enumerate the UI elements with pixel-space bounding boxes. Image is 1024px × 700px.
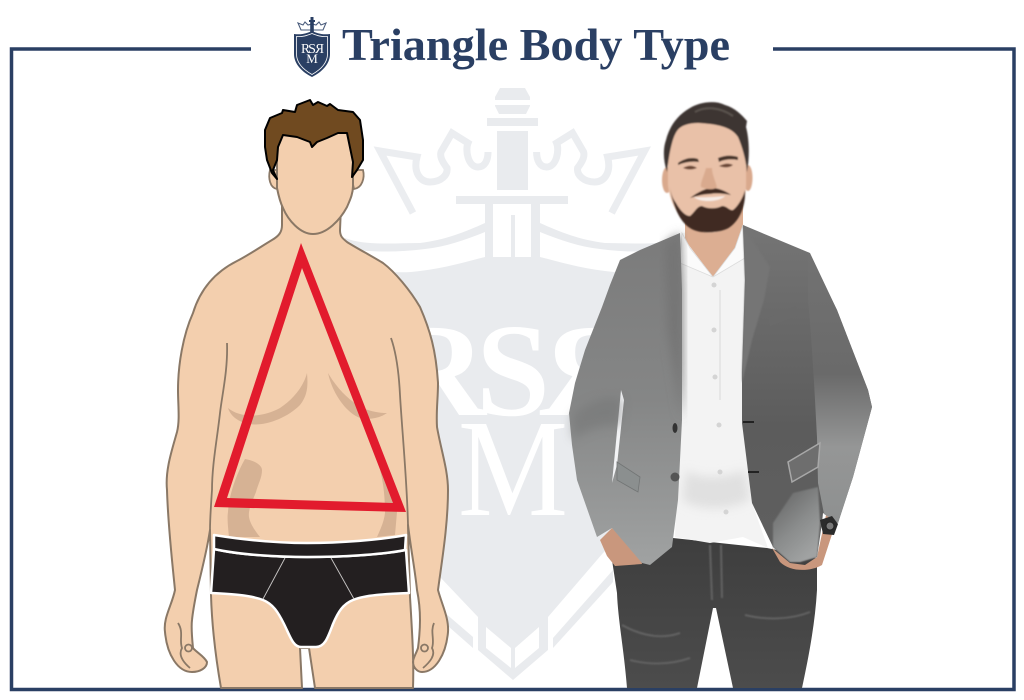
- underwear: [211, 535, 409, 647]
- ears of man: [662, 167, 672, 193]
- blazer buttons: [670, 421, 759, 482]
- underwear seams: [263, 558, 354, 599]
- watermark: RSRM crest: M: [458, 392, 568, 546]
- illustration: body figure: [165, 100, 448, 688]
- logo shield inset: [296, 34, 328, 74]
- brows: [678, 156, 738, 165]
- watermark: RSRM crest: [345, 88, 680, 680]
- eyes: [683, 164, 733, 170]
- blazer left side: [569, 233, 682, 565]
- photo: man in grey blazer: [569, 102, 872, 688]
- logo monogram: M: [306, 51, 318, 66]
- underwear body: [211, 549, 409, 647]
- blazer gap at left arm: [612, 390, 624, 483]
- hair of man: [664, 102, 749, 172]
- shirt shading: [682, 290, 750, 508]
- shirt buttons: [712, 282, 728, 514]
- logo monogram: S: [308, 42, 316, 57]
- left lapel shade: [665, 233, 682, 420]
- logo shield: [294, 31, 330, 77]
- logo crown: [298, 22, 326, 30]
- blazer right side: [742, 225, 872, 562]
- breast pocket: [768, 306, 797, 326]
- torso contour lines: [178, 338, 434, 668]
- watermark: RSRM crest: R: [539, 296, 637, 444]
- right lapel: [742, 225, 770, 383]
- right pocket flap: [788, 443, 820, 482]
- watch: [820, 516, 838, 535]
- smile: [694, 196, 725, 201]
- body shadows: [228, 373, 397, 537]
- hair: [265, 100, 363, 179]
- logo monogram: R: [314, 42, 324, 57]
- red triangle overlay: [214, 243, 406, 512]
- shirt: [675, 225, 768, 548]
- left pocket flap: [617, 462, 640, 492]
- neck: [685, 205, 743, 277]
- right sleeve: [808, 252, 872, 523]
- head: [662, 102, 752, 233]
- logo sword: [309, 17, 315, 34]
- body silhouette: [165, 206, 448, 688]
- face of man: [668, 120, 746, 233]
- logo monogram: [301, 42, 324, 66]
- underwear waistband: [214, 535, 406, 557]
- logo monogram: R: [301, 42, 311, 57]
- ears: [269, 170, 364, 189]
- title: Triangle Body Type: [342, 20, 730, 70]
- right hem panel: [773, 487, 820, 562]
- watermark: RSRM crest: S: [476, 296, 550, 444]
- face: [277, 130, 353, 234]
- jeans highlights: [622, 545, 810, 664]
- watermark: RSRM crest: R: [390, 296, 488, 444]
- beard: [670, 186, 745, 232]
- left sleeve shading: [572, 398, 622, 440]
- moustache: [690, 188, 731, 198]
- hair highlights: [695, 108, 733, 116]
- right hand: [772, 515, 836, 570]
- nose shading: [701, 168, 717, 189]
- jeans: [612, 538, 817, 688]
- left hand: [600, 528, 642, 566]
- collar: [680, 225, 745, 277]
- logo: RSRM shield: [294, 17, 330, 77]
